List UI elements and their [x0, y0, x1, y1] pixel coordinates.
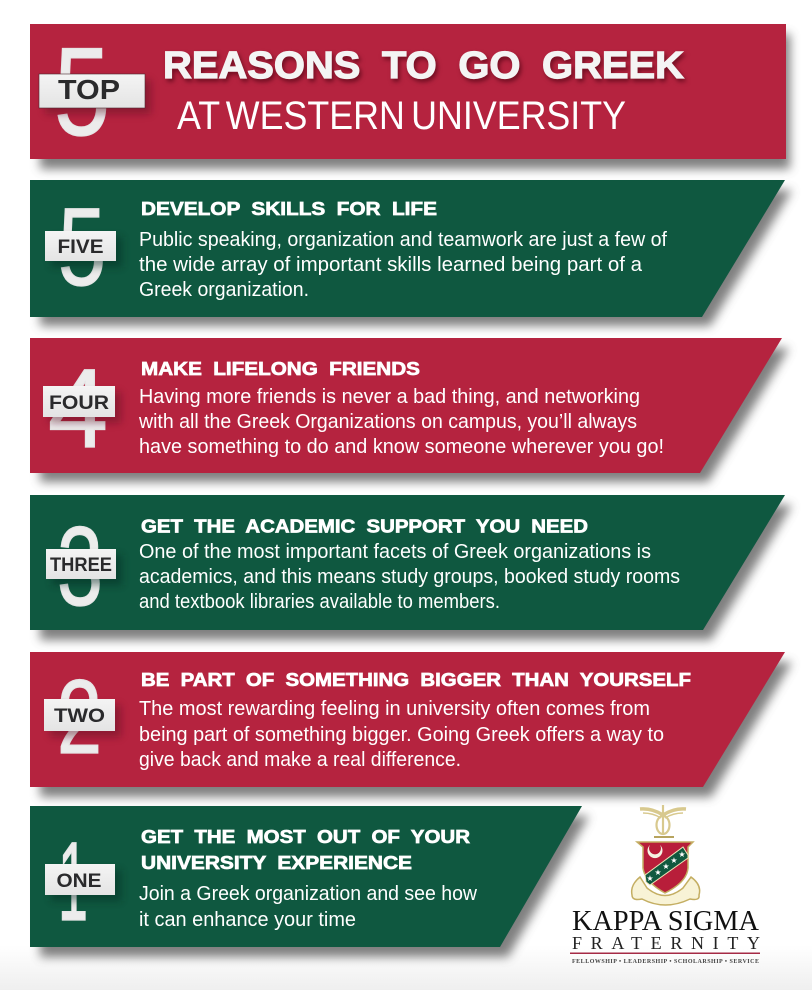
panel: reason two	[30, 652, 792, 797]
heading one	[141, 826, 470, 873]
body five	[139, 229, 667, 301]
body five: Public speaking, organization and teamwork are just a few of	[139, 229, 667, 251]
body one	[139, 883, 478, 931]
number badge two: TWO	[54, 706, 105, 727]
heading three: GET THE ACADEMIC SUPPORT YOU NEED	[141, 516, 588, 536]
body five: Greek organization.	[139, 279, 309, 301]
heading four: MAKE LIFELONG FRIENDS	[141, 358, 420, 379]
icon: stars: ★	[662, 862, 670, 871]
wordmark: KAPPA SIGMA	[572, 906, 760, 937]
panel: reason three	[30, 495, 792, 640]
icon: shield	[637, 842, 693, 893]
number badge five: FIVE	[58, 237, 104, 258]
heading two: BE PART OF SOMETHING BIGGER THAN YOURSELF	[141, 669, 691, 690]
body four: with all the Greek Organizations on campus, you’ll always	[138, 411, 637, 433]
logo: Kappa Sigma crest and wordmark	[570, 805, 760, 965]
icon: stars: ★	[678, 850, 686, 859]
number badge four: FOUR	[49, 393, 109, 414]
heading one: UNIVERSITY EXPERIENCE	[141, 852, 412, 873]
wordmark subtitle: FRATERNITY	[572, 933, 760, 953]
top 5 badge: 5	[54, 23, 110, 162]
body two	[139, 698, 664, 771]
icon: stars	[646, 850, 686, 883]
number badge five: 5	[58, 186, 106, 309]
number badge one: 1	[58, 819, 88, 944]
number badge three: THREE	[50, 555, 112, 576]
icon: scroll	[632, 877, 700, 905]
number badge three: 3	[57, 504, 103, 629]
body one: it can enhance your time	[139, 909, 356, 931]
panel: reason four	[30, 338, 789, 482]
body four: have something to do and know someone wherever you go!	[139, 436, 664, 458]
top 5 badge	[39, 23, 151, 162]
body three: One of the most important facets of Greek organizations is	[139, 541, 651, 563]
heading five: DEVELOP SKILLS FOR LIFE	[141, 198, 437, 219]
number badge two: 2	[57, 659, 102, 776]
title line 1: REASONS TO GO GREEK	[163, 45, 685, 87]
body five: the wide array of important skills learned being part of a	[139, 254, 643, 276]
heading one: GET THE MOST OUT OF YOUR	[141, 826, 470, 847]
body four: Having more friends is never a bad thing, and networking	[139, 386, 640, 408]
number badge four: 4	[48, 346, 108, 471]
panel: reason five	[30, 180, 792, 326]
body two: give back and make a real difference.	[139, 749, 461, 771]
top 5 badge: TOP	[58, 74, 120, 105]
body one: Join a Greek organization and see how	[139, 883, 478, 905]
number badge one: ONE	[56, 871, 102, 892]
panel: title banner	[30, 23, 790, 169]
title line 2: AT WESTERN UNIVERSITY	[177, 94, 626, 138]
tagline: FELLOWSHIP • LEADERSHIP • SCHOLARSHIP • SERVICE	[572, 959, 759, 965]
body three	[139, 541, 680, 613]
icon: stars: ★	[646, 874, 654, 883]
icon: stars: ★	[670, 856, 678, 865]
body four	[138, 386, 664, 458]
body three: academics, and this means study groups, booked study rooms	[139, 566, 680, 588]
icon: caduceus	[640, 805, 686, 837]
panel: reason one	[30, 806, 589, 957]
icon: stars: ★	[654, 868, 662, 877]
body two: The most rewarding feeling in university often comes from	[139, 698, 650, 720]
body two: being part of something bigger. Going Greek offers a way to	[139, 724, 664, 746]
body three: and textbook libraries available to members.	[139, 591, 500, 613]
